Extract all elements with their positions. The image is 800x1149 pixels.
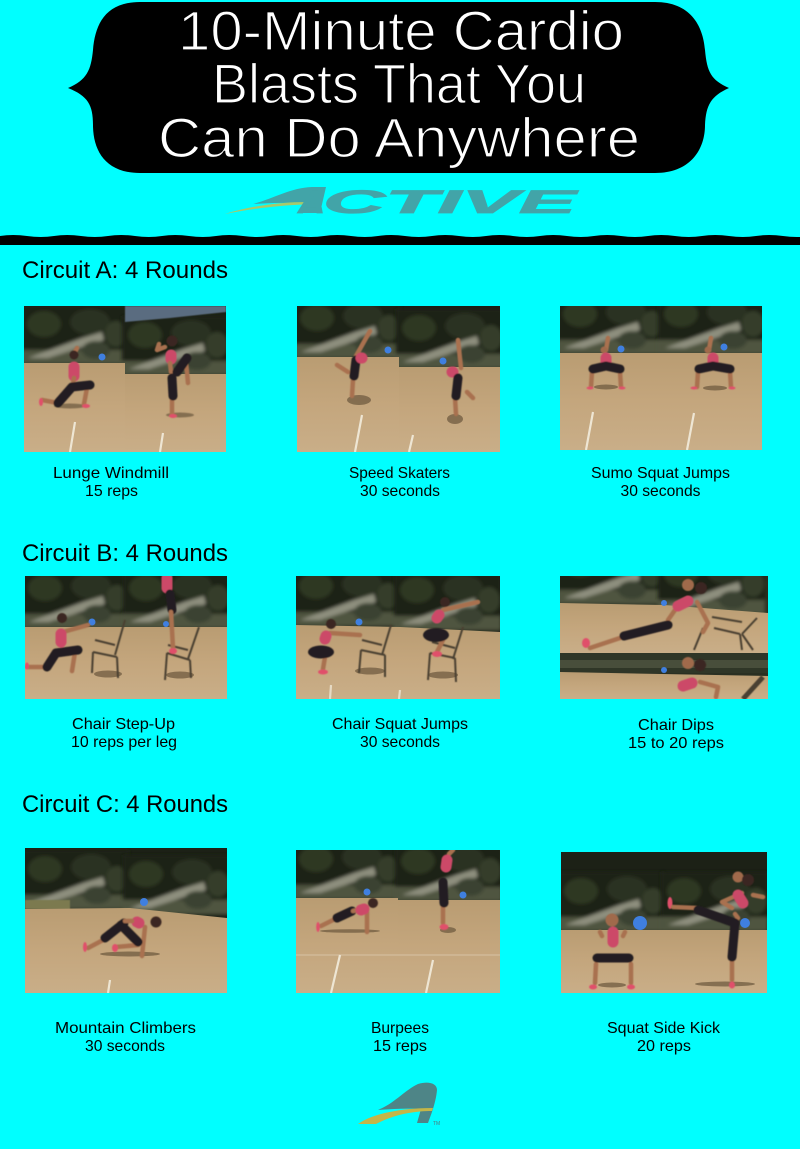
wavy divider: [0, 235, 800, 245]
chair: [92, 620, 125, 678]
caption: 15 to 20 reps: [628, 735, 724, 752]
figure: skater right: [452, 340, 473, 414]
logo: A mark: [358, 1083, 440, 1127]
exercise: Lunge Windmill: [21, 305, 229, 500]
title banner: [68, 0, 729, 173]
caption: 30 seconds: [360, 483, 440, 500]
exercise: Sumo Squat Jumps: [557, 295, 765, 500]
caption: Chair Step-Up: [72, 716, 175, 733]
caption: [55, 1020, 196, 1055]
logo: ACTIVE wordmark: CTIVE: [323, 184, 580, 220]
figure: jump: [423, 597, 478, 657]
figure: knee raise: [157, 336, 194, 418]
caption: 10 reps per leg: [71, 734, 177, 751]
caption: [371, 1020, 429, 1055]
caption: Mountain Climbers: [55, 1020, 196, 1037]
figure: lunge: [39, 348, 90, 408]
title banner: 10-Minute Cardio: [178, 0, 624, 62]
figure: sumo squat right: [690, 338, 736, 390]
caption: Speed Skaters: [349, 465, 450, 482]
heading: circuit B: Circuit B: 4 Rounds: [22, 540, 228, 567]
heading: circuit C: Circuit C: 4 Rounds: [22, 791, 228, 818]
exercise: Burpees: [293, 840, 502, 1055]
chair: [694, 617, 757, 650]
caption: [607, 1020, 721, 1055]
photo: lunge windmill: [24, 306, 226, 452]
title banner: Blasts That You: [212, 52, 586, 115]
caption: [53, 465, 169, 500]
exercise: Chair Step-Up: [22, 569, 230, 751]
figure: squat: [589, 914, 635, 990]
figure: dip top: [582, 579, 708, 648]
photo: sumo squat jumps: [560, 306, 762, 450]
figure: dip bottom: [682, 657, 763, 699]
figure: plank: [316, 898, 378, 932]
logo: ACTIVE wordmark: A: [297, 184, 325, 220]
caption: Chair Dips: [638, 717, 714, 734]
photo: chair squat jumps: [296, 576, 500, 699]
exercise: Chair Squat Jumps: [293, 567, 501, 751]
logo: ACTIVE wordmark: [225, 184, 580, 220]
chair: [428, 627, 463, 682]
photo: squat side kick: [561, 852, 767, 993]
photo: burpees: [296, 850, 500, 993]
figure: jump: [440, 850, 453, 930]
heading: circuit A: Circuit A: 4 Rounds: [22, 257, 228, 284]
chair: [165, 627, 199, 680]
caption: [591, 465, 730, 500]
caption: Sumo Squat Jumps: [591, 465, 730, 482]
caption: 30 seconds: [85, 1038, 165, 1055]
figure: sumo squat left: [586, 338, 626, 390]
figure: skater left: [337, 331, 370, 396]
figure: step-up top: [167, 578, 177, 654]
caption: [332, 716, 468, 751]
caption: Burpees: [371, 1020, 429, 1037]
photo: chair dips: [560, 576, 768, 699]
figure: step-up lunge: [25, 613, 88, 671]
exercise: Chair Dips: [557, 545, 768, 752]
caption: Chair Squat Jumps: [332, 716, 468, 733]
title banner: Can Do Anywhere: [158, 106, 640, 169]
caption: [349, 465, 450, 500]
caption: 30 seconds: [620, 483, 700, 500]
figure: mountain climber: [83, 916, 162, 956]
caption: 15 reps: [373, 1038, 427, 1055]
photo: mountain climbers: [25, 848, 227, 993]
figure: squat: [308, 619, 360, 674]
caption: 20 reps: [637, 1038, 691, 1055]
caption: Squat Side Kick: [607, 1020, 721, 1037]
exercise: Mountain Climbers: [22, 848, 230, 1055]
exercise: Squat Side Kick: [558, 852, 768, 1055]
exercise: Speed Skaters: [294, 299, 503, 500]
caption: [71, 716, 177, 751]
caption: 30 seconds: [360, 734, 440, 751]
photo: speed skaters: [297, 306, 500, 452]
chair: [359, 625, 391, 677]
caption: 15 reps: [85, 483, 138, 500]
logo: A mark: TM: [433, 1121, 440, 1127]
caption: [628, 717, 724, 752]
caption: Lunge Windmill: [53, 465, 169, 482]
photo: chair step-up: [25, 576, 227, 699]
figure: side kick: [668, 872, 763, 988]
